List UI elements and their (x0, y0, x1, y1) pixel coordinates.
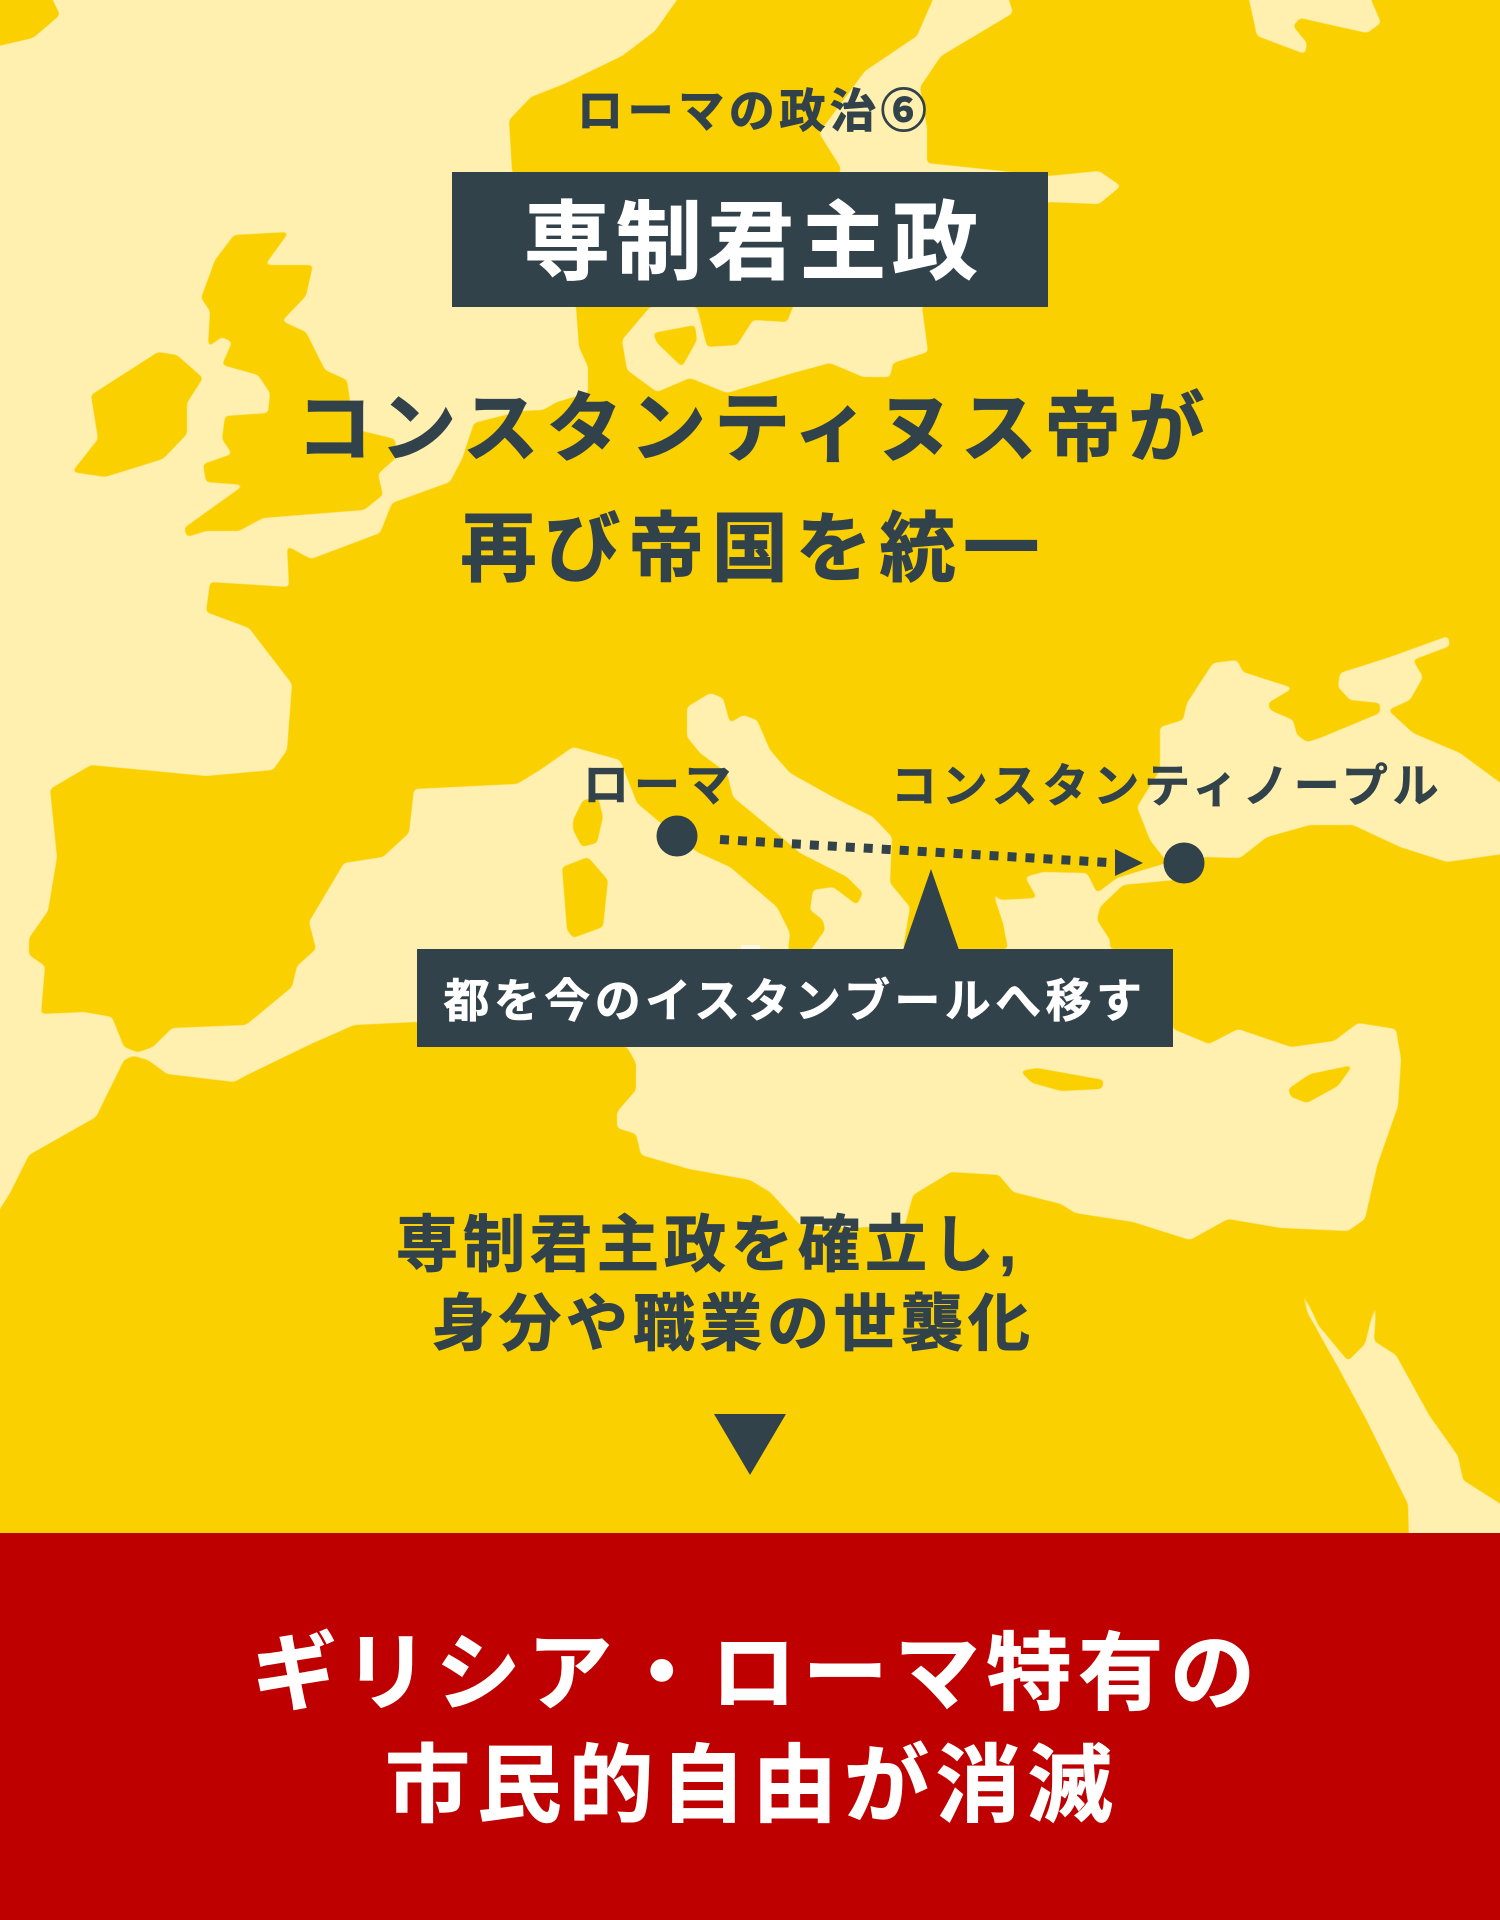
headline (296, 387, 1212, 592)
headline: コンスタンティヌス帝が (296, 387, 1212, 472)
city label: Constantinople: コンスタンティノープル (891, 760, 1443, 812)
city label: Rome: ローマ (583, 759, 736, 811)
conclusion panel: ギリシア・ローマ特有の (252, 1627, 1262, 1722)
callout: 都を今のイスタンブールへ移す (444, 975, 1146, 1027)
text block: result (396, 1211, 1035, 1359)
marker: Constantinople (1164, 842, 1204, 884)
marker: Rome (656, 816, 698, 856)
arrow down (714, 1414, 786, 1475)
headline: 再び帝国を統一 (460, 507, 1047, 592)
title box: 専制君主政 (524, 195, 984, 291)
small heading: ローマの政治⑥ (577, 85, 931, 137)
title box (452, 172, 1048, 307)
callout (417, 869, 1173, 1047)
conclusion panel: 市民的自由が消滅 (385, 1739, 1119, 1834)
text block: result: 専制君主政を確立し, (396, 1211, 1021, 1280)
dotted arrow from Rome to Constantinople (720, 840, 1143, 876)
conclusion panel (0, 1533, 1500, 1920)
text block: result: 身分や職業の世襲化 (432, 1290, 1035, 1359)
